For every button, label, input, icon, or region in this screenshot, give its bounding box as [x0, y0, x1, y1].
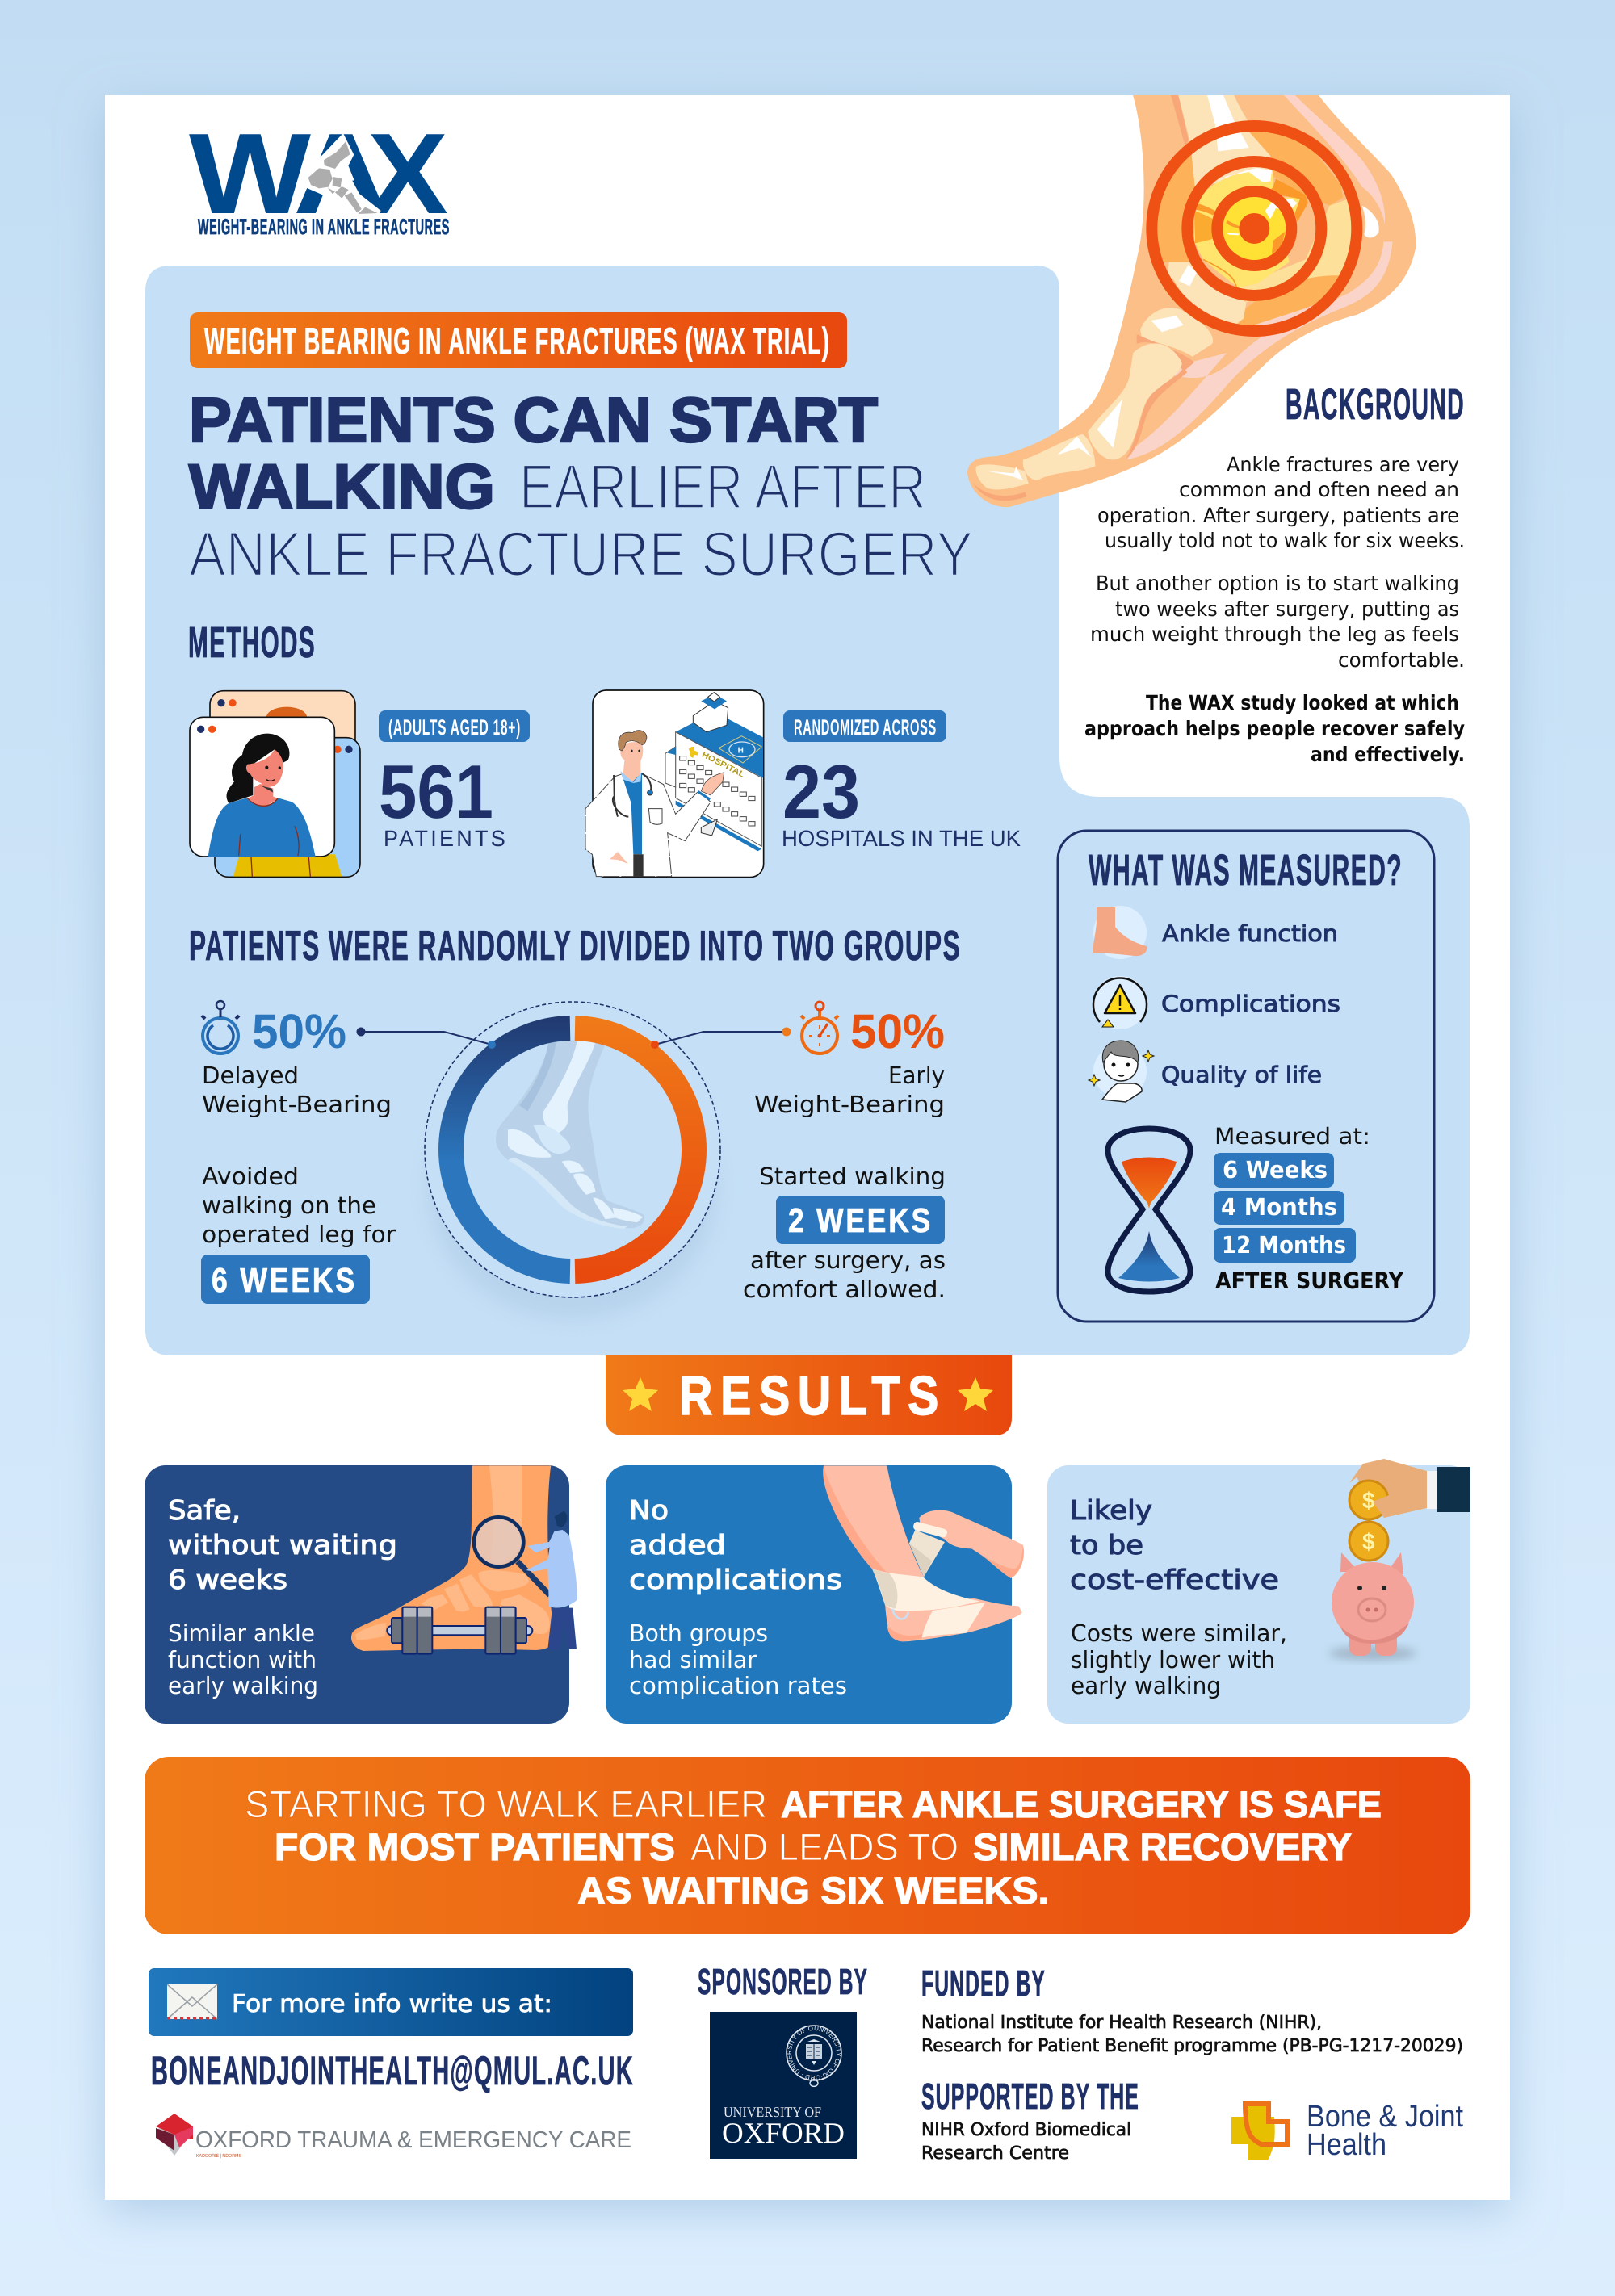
illustration: ankle x-ray	[496, 1041, 644, 1229]
title	[189, 384, 973, 589]
panel: result complications: had similar	[629, 1646, 757, 1674]
pill: 6 weeks: 6 Weeks	[1223, 1156, 1328, 1184]
pill: 2 weeks: 2 WEEKS	[788, 1201, 933, 1239]
text: early group	[743, 1004, 946, 1303]
logo: Bone and Joint Health: Health	[1307, 2128, 1386, 2162]
text: funded by: National Institute for Health Research (NIHR),	[921, 2013, 1322, 2033]
panel: result cost: to be	[1070, 1529, 1143, 1561]
logo: University of Oxford: UNIVERSITY OF OXFORD · UNIVERSITY OF OXFORD	[787, 2026, 841, 2080]
text: delayed group: Avoided	[202, 1163, 299, 1190]
panel: result complications: No	[629, 1494, 669, 1526]
illustration: foot with pain target	[967, 95, 1416, 507]
logo: WAX: W	[189, 110, 311, 238]
panel: result complications	[606, 1465, 1024, 1724]
text: early group: Weight-Bearing	[754, 1091, 945, 1118]
text: early group: comfort allowed.	[743, 1276, 946, 1303]
heading: background: BACKGROUND	[1286, 380, 1465, 429]
icon: complications	[1093, 976, 1147, 1029]
panel: what was measured: Quality of life	[1161, 1062, 1322, 1088]
tag: trial name: WEIGHT BEARING IN ANKLE FRACTURES (WAX TRIAL)	[204, 320, 830, 362]
panel: result complications: Both groups	[629, 1619, 768, 1647]
pill: 6 weeks	[201, 1255, 370, 1304]
logo: Oxford Trauma: OXFORD TRAUMA & EMERGENCY CARE	[195, 2127, 631, 2153]
stat: patients	[379, 710, 530, 851]
banner: conclusion	[145, 1757, 1470, 1934]
text: funded by	[921, 1963, 1463, 2056]
chart: 50/50 donut	[425, 1002, 720, 1320]
logo: WAX: A	[293, 110, 389, 238]
contact bar: For more info write us at:	[232, 1990, 552, 2018]
logo: WAX: WEIGHT-BEARING IN ANKLE FRACTURES	[198, 215, 450, 239]
text: funded by: Research for Patient Benefit programme (PB-PG-1217-20029)	[921, 2036, 1463, 2056]
text: early group: Early	[888, 1062, 945, 1089]
text: delayed group: walking on the	[202, 1192, 376, 1219]
panel: result cost: Likely	[1070, 1494, 1152, 1526]
stat: patients: 561	[379, 749, 493, 834]
logo: Oxford Trauma	[156, 2114, 631, 2159]
text: background section: approach helps people recover safely	[1084, 717, 1465, 740]
logo: Bone and Joint Health	[1231, 2100, 1463, 2162]
text: background section: much weight through the leg as feels	[1090, 622, 1459, 646]
panel: result safe	[145, 1465, 577, 1724]
panel: result safe: early walking	[168, 1672, 318, 1699]
title: EARLIER AFTER	[519, 450, 926, 522]
panel: result safe: without waiting	[168, 1529, 397, 1561]
stat: patients: PATIENTS	[384, 826, 508, 851]
icon: envelope	[167, 1984, 217, 2019]
logo: University of Oxford: UNIVERSITY OF	[724, 2104, 821, 2120]
logo: Oxford Trauma: KADOORIE | NDORMS	[196, 2153, 241, 2159]
icon: doctor and hospital: HOSPITAL	[700, 750, 746, 779]
leader lines	[361, 1032, 787, 1045]
pill: 4 months: 4 Months	[1221, 1193, 1337, 1221]
panel: result cost: slightly lower with	[1071, 1646, 1275, 1674]
illustration: piggy bank and coins: $	[1362, 1529, 1375, 1554]
logo: University of Oxford	[710, 2012, 857, 2159]
text: background section: and effectively.	[1311, 743, 1465, 766]
panel: result cost: Costs were similar,	[1071, 1619, 1287, 1647]
text: early group: after surgery, as	[750, 1246, 946, 1274]
title: WALKING	[189, 450, 495, 522]
contact bar	[149, 1968, 633, 2036]
stat: hospitals	[782, 710, 1021, 851]
heading: two groups: PATIENTS WERE RANDOMLY DIVIDED INTO TWO GROUPS	[189, 923, 961, 970]
icon: patient windows	[190, 691, 360, 877]
logo: WAX: X	[367, 110, 448, 238]
panel: result complications: complications	[629, 1564, 842, 1595]
pill: 6 weeks: 6 WEEKS	[212, 1261, 357, 1299]
logo: University of Oxford: OXFORD	[722, 2117, 845, 2149]
text: early group: Started walking	[759, 1163, 946, 1190]
white card	[105, 95, 1510, 2200]
illustration: piggy bank and coins: $	[1362, 1488, 1375, 1513]
text: background section: The WAX study looked at which	[1146, 691, 1459, 714]
title: PATIENTS CAN START	[189, 384, 878, 455]
panel: result cost	[1047, 1459, 1470, 1724]
illustration: bandaged ankle	[823, 1465, 1024, 1641]
text: email: BONEANDJOINTHEALTH@QMUL.AC.UK	[151, 2048, 634, 2093]
text: background section	[1084, 380, 1465, 766]
panel: result cost: early walking	[1071, 1672, 1221, 1699]
text: supported by: Research Centre	[921, 2143, 1069, 2164]
stat: patients: (ADULTS AGED 18+)	[388, 715, 521, 739]
text: delayed group: operated leg for	[202, 1221, 396, 1248]
panel: what was measured: Ankle function	[1162, 920, 1338, 947]
tag: trial name	[190, 312, 847, 368]
text: delayed group: Weight-Bearing	[202, 1091, 392, 1118]
logo: Bone and Joint Health: Bone & Joint	[1307, 2100, 1463, 2134]
panel: main blue study panel	[145, 266, 1470, 1355]
text: background section: two weeks after surgery, putting as	[1115, 597, 1459, 621]
text: delayed group: Delayed	[202, 1062, 299, 1089]
pill: 2 weeks	[776, 1196, 945, 1244]
icon: doctor and hospital: H	[738, 746, 744, 755]
heading: sponsored by: SPONSORED BY	[698, 1961, 868, 2002]
banner: conclusion: AND LEADS TO	[690, 1825, 959, 1868]
icon: hourglass	[1108, 1129, 1190, 1292]
panel: result cost: cost-effective	[1070, 1564, 1279, 1595]
banner: conclusion: AS WAITING SIX WEEKS.	[577, 1869, 1049, 1912]
panel: result complications: added	[629, 1529, 726, 1561]
panel: result safe: 6 weeks	[168, 1564, 287, 1595]
icon: quality of life	[1089, 1041, 1154, 1102]
title: ANKLE FRACTURE SURGERY	[189, 518, 973, 589]
banner: conclusion: STARTING TO WALK EARLIER	[245, 1783, 767, 1825]
stat: hospitals: RANDOMIZED ACROSS	[794, 715, 937, 739]
icon: ankle function	[1093, 906, 1147, 959]
banner: conclusion: SIMILAR RECOVERY	[973, 1825, 1352, 1868]
pill: 12 months: 12 Months	[1222, 1231, 1346, 1259]
stat: hospitals: HOSPITALS IN THE UK	[782, 826, 1021, 851]
text: supported by	[921, 2076, 1139, 2164]
heading tab: results	[606, 1355, 1012, 1435]
text: delayed group	[201, 1004, 396, 1304]
text: background section: common and often need an	[1179, 478, 1459, 501]
panel: what was measured: AFTER SURGERY	[1215, 1267, 1404, 1294]
stat: hospitals: 23	[782, 749, 860, 834]
panel: what was measured: Complications	[1161, 991, 1340, 1017]
text: early group: 50%	[850, 1004, 945, 1058]
icon: stopwatch orange	[801, 1002, 838, 1054]
text: background section: usually told not to walk for six weeks.	[1105, 529, 1465, 552]
heading tab: results: RESULTS	[679, 1365, 946, 1427]
banner: conclusion: FOR MOST PATIENTS	[275, 1825, 675, 1868]
panel: result safe: Safe,	[168, 1494, 241, 1526]
heading: methods: METHODS	[188, 618, 316, 667]
illustration: piggy bank and coins	[1328, 1459, 1470, 1660]
panel: what was measured: Measured at:	[1214, 1123, 1370, 1150]
text: background section: But another option is to start walking	[1096, 572, 1459, 595]
banner: conclusion: AFTER ANKLE SURGERY IS SAFE	[781, 1783, 1382, 1825]
panel: result safe: Similar ankle	[168, 1619, 315, 1647]
text: background section: comfortable.	[1338, 648, 1465, 672]
icon: stopwatch blue	[202, 1001, 239, 1054]
logo: WAX	[189, 110, 450, 239]
icon: doctor and hospital	[585, 690, 764, 878]
panel: result safe: function with	[168, 1646, 317, 1674]
leader dots	[357, 1027, 791, 1049]
text: background section: operation. After surgery, patients are	[1097, 504, 1459, 527]
illustration: foot with dumbbell	[351, 1465, 577, 1654]
text: delayed group: 50%	[252, 1004, 346, 1058]
text: background section: Ankle fractures are very	[1227, 453, 1459, 476]
panel: what was measured	[1058, 831, 1434, 1322]
panel: result complications: complication rates	[629, 1672, 847, 1699]
text: funded by: FUNDED BY	[921, 1963, 1046, 2004]
text: supported by: SUPPORTED BY THE	[921, 2076, 1139, 2117]
text: supported by: NIHR Oxford Biomedical	[921, 2120, 1131, 2140]
